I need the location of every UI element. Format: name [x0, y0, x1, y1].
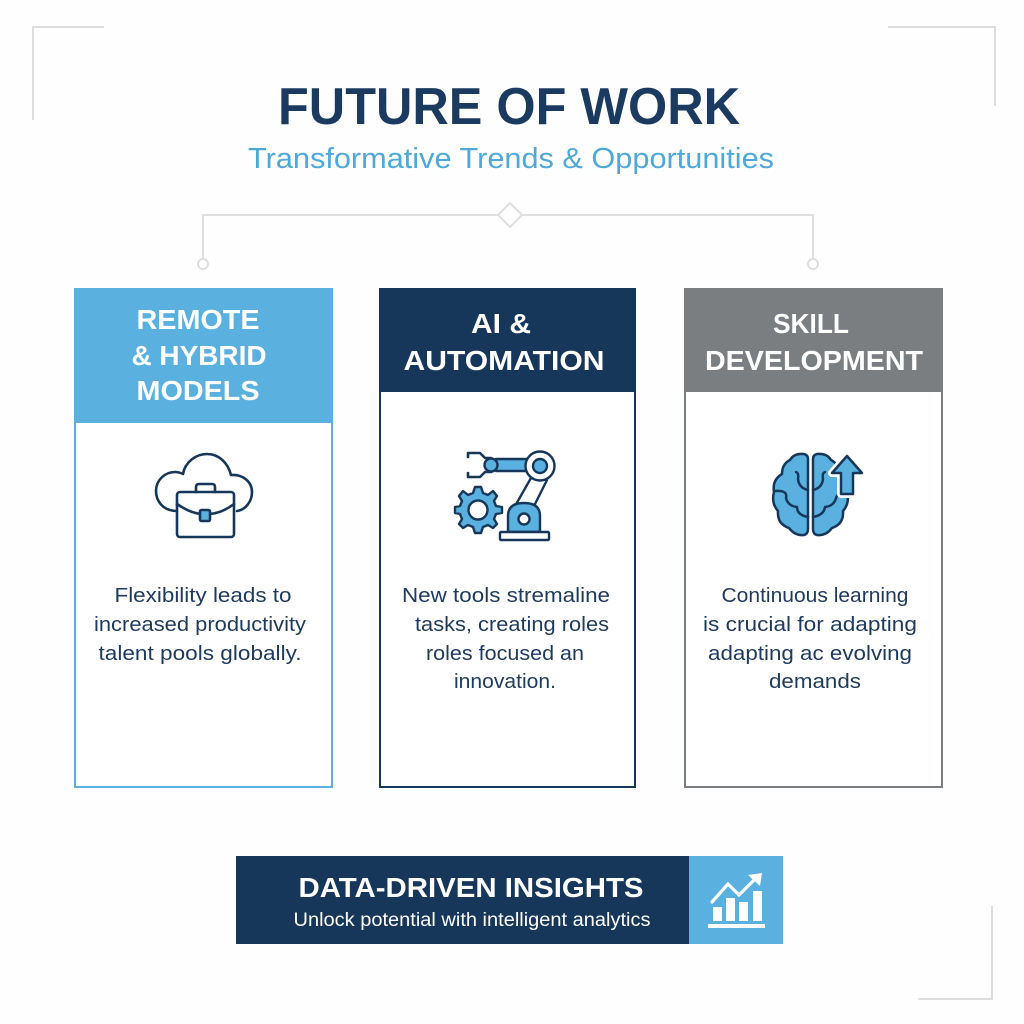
panel header: skill: [684, 288, 943, 392]
connector bracket: [198, 203, 818, 269]
panel header: remote: [74, 288, 333, 423]
body text: skill: demands: [769, 670, 861, 693]
panel: skill development: [684, 288, 943, 787]
body text: skill: is crucial for adapting: [703, 613, 917, 636]
title: FUTURE OF WORK: [278, 78, 740, 136]
body text: AI: innovation.: [454, 670, 556, 693]
icon: brain with up arrow: [773, 454, 862, 535]
subtitle: Transformative Trends & Opportunities: [248, 143, 774, 175]
banner heading: DATA-DRIVEN INSIGHTS: [298, 872, 644, 903]
body text: skill: Continuous learning: [722, 584, 908, 607]
panel header: remote: MODELS: [136, 375, 260, 406]
body text: remote: [94, 584, 307, 665]
body text: remote: increased productivity: [94, 613, 307, 636]
body text: AI: New tools stremaline: [402, 584, 610, 607]
panel header: remote: & HYBRID: [132, 340, 266, 371]
body text: AI: roles focused an: [426, 642, 584, 665]
panel: AI and automation: [379, 288, 636, 787]
icon: rising bar chart: [708, 873, 765, 928]
body text: skill: adapting ac evolving: [708, 642, 912, 665]
panel header: remote: REMOTE: [136, 304, 260, 335]
panel: remote and hybrid models: [74, 288, 333, 787]
panel header: AI: AI &: [471, 308, 531, 339]
icon: cloud and briefcase: [156, 454, 252, 537]
panel header: AI: [379, 288, 636, 392]
body text: AI: tasks, creating roles: [415, 613, 609, 636]
body text: remote: Flexibility leads to: [114, 584, 292, 607]
icon: robot arm and gear: [455, 452, 554, 540]
banner: data-driven insights: [236, 856, 783, 944]
panel header: skill: SKILL: [773, 308, 849, 339]
banner subtext: Unlock potential with intelligent analytics: [294, 910, 650, 931]
body text: remote: talent pools globally.: [98, 642, 302, 665]
body text: skill: [703, 584, 917, 693]
panel header: AI: AUTOMATION: [404, 345, 604, 376]
panel header: skill: DEVELOPMENT: [705, 345, 923, 376]
body text: AI: [402, 584, 610, 693]
